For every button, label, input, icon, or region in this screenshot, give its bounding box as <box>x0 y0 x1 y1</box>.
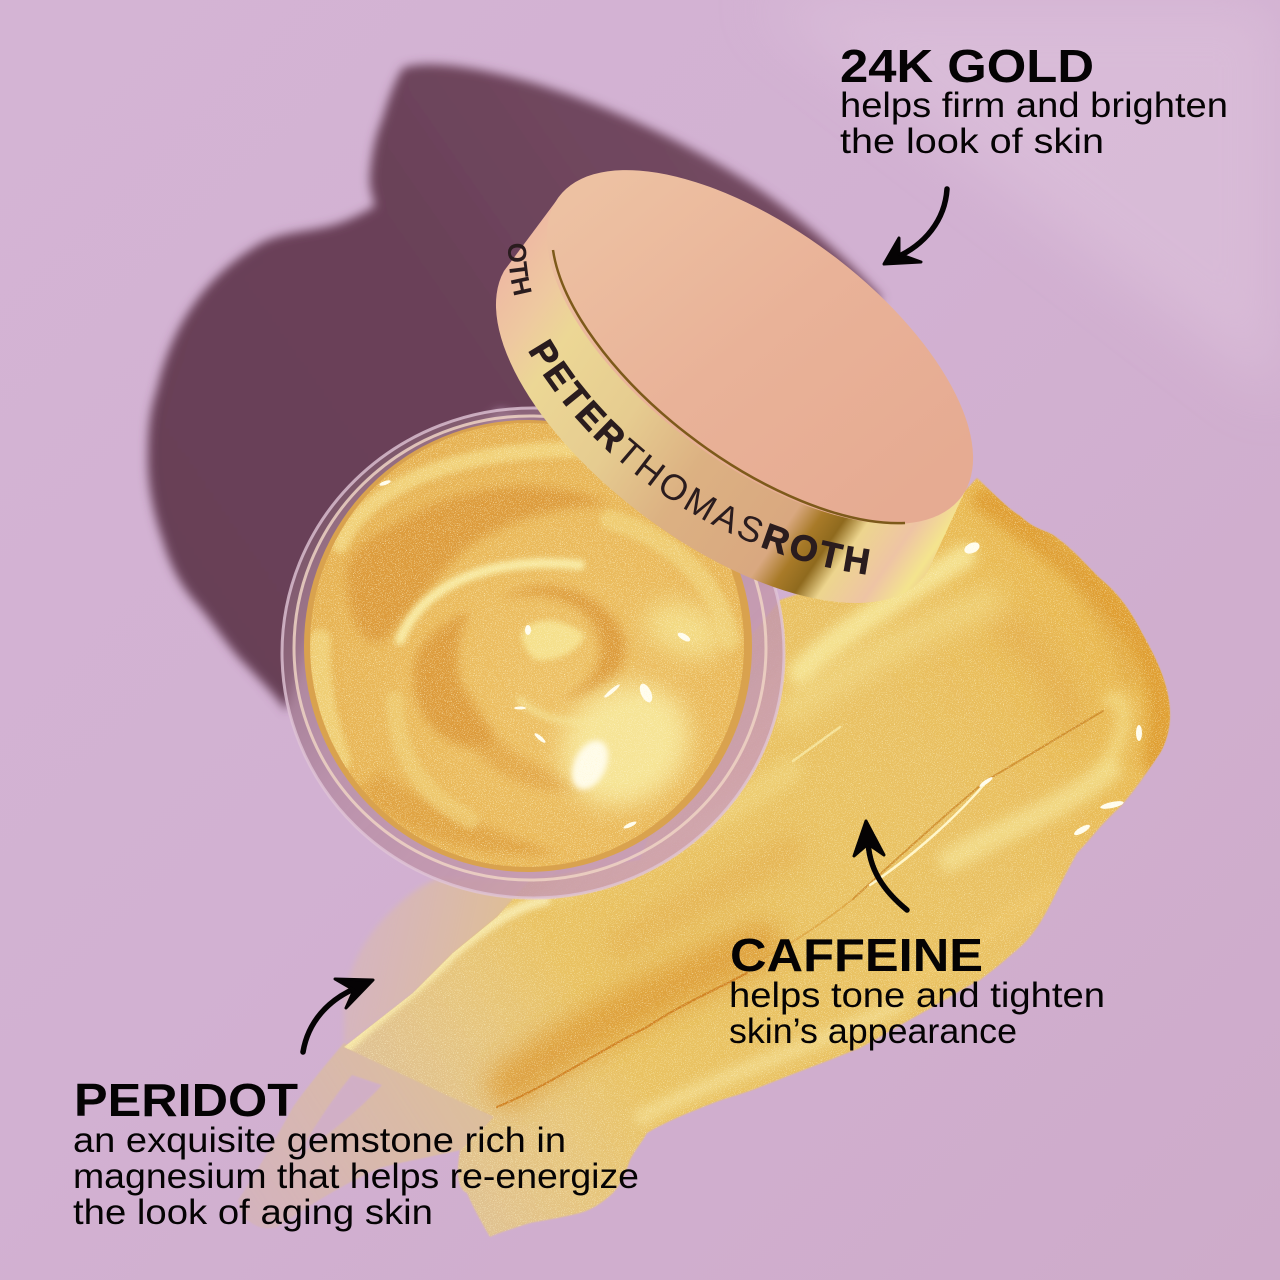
gel shimmer <box>300 420 760 875</box>
swirl dark troughs <box>347 486 625 856</box>
body: peridot: magnesium that helps re-energize <box>73 1157 639 1196</box>
body: peridot: an exquisite gemstone rich in <box>73 1121 566 1160</box>
cast shadow <box>148 64 882 711</box>
callout: caffeine <box>729 929 1105 1051</box>
lid <box>496 170 974 603</box>
smear lilac gap <box>296 1075 382 1158</box>
lid edge highlight <box>553 250 905 523</box>
lid: OTH <box>508 244 532 296</box>
lid: PETERTHOMASROTH <box>528 338 870 575</box>
jar inner rim <box>294 416 766 880</box>
smear lower pale lobe <box>238 1043 493 1228</box>
body: caffeine <box>729 976 1105 1051</box>
body: caffeine: helps tone and tighten <box>729 976 1105 1015</box>
smear crease lines <box>497 711 1103 1107</box>
heading: peridot: PERIDOT <box>74 1074 298 1126</box>
lid band lettering <box>528 350 888 577</box>
smear tone and streaks <box>344 479 1170 1236</box>
gel hot spot <box>568 737 612 793</box>
body: 24K gold: the look of skin <box>840 122 1104 161</box>
body: peridot: the look of aging skin <box>73 1193 433 1232</box>
arrow: to lid <box>884 189 947 264</box>
smear glints <box>963 540 1142 837</box>
gel fill <box>310 423 744 867</box>
gel glints <box>379 479 692 830</box>
callout: 24K gold <box>840 40 1228 161</box>
swirl bright ridges <box>320 450 730 820</box>
body: caffeine: skin’s appearance <box>729 1012 1017 1051</box>
heading: caffeine: CAFFEINE <box>730 929 983 981</box>
smear upper feathered tail <box>344 878 540 1047</box>
background light streak <box>760 0 1280 400</box>
smear main body <box>344 478 1170 1237</box>
jar gel edge <box>304 420 752 872</box>
arrow: to tail <box>303 979 373 1052</box>
smear shimmer <box>346 479 1170 1236</box>
gel bright blobs <box>550 594 728 818</box>
lid top face <box>547 170 973 524</box>
body: 24K gold <box>840 86 1228 161</box>
lid side band <box>496 202 965 603</box>
lid wrapped lettering <box>508 243 520 314</box>
gold smear swatch <box>230 470 1180 1250</box>
arrow: to smear <box>854 821 907 910</box>
glass jar <box>282 408 784 898</box>
heading: 24K gold: 24K GOLD <box>840 40 1094 92</box>
callout: peridot <box>73 1074 639 1232</box>
swirl center knob <box>522 621 585 660</box>
body: 24K gold: helps firm and brighten <box>840 86 1228 125</box>
gel swirl <box>300 420 760 875</box>
body: peridot <box>73 1121 639 1232</box>
jar outer wall <box>282 408 784 898</box>
